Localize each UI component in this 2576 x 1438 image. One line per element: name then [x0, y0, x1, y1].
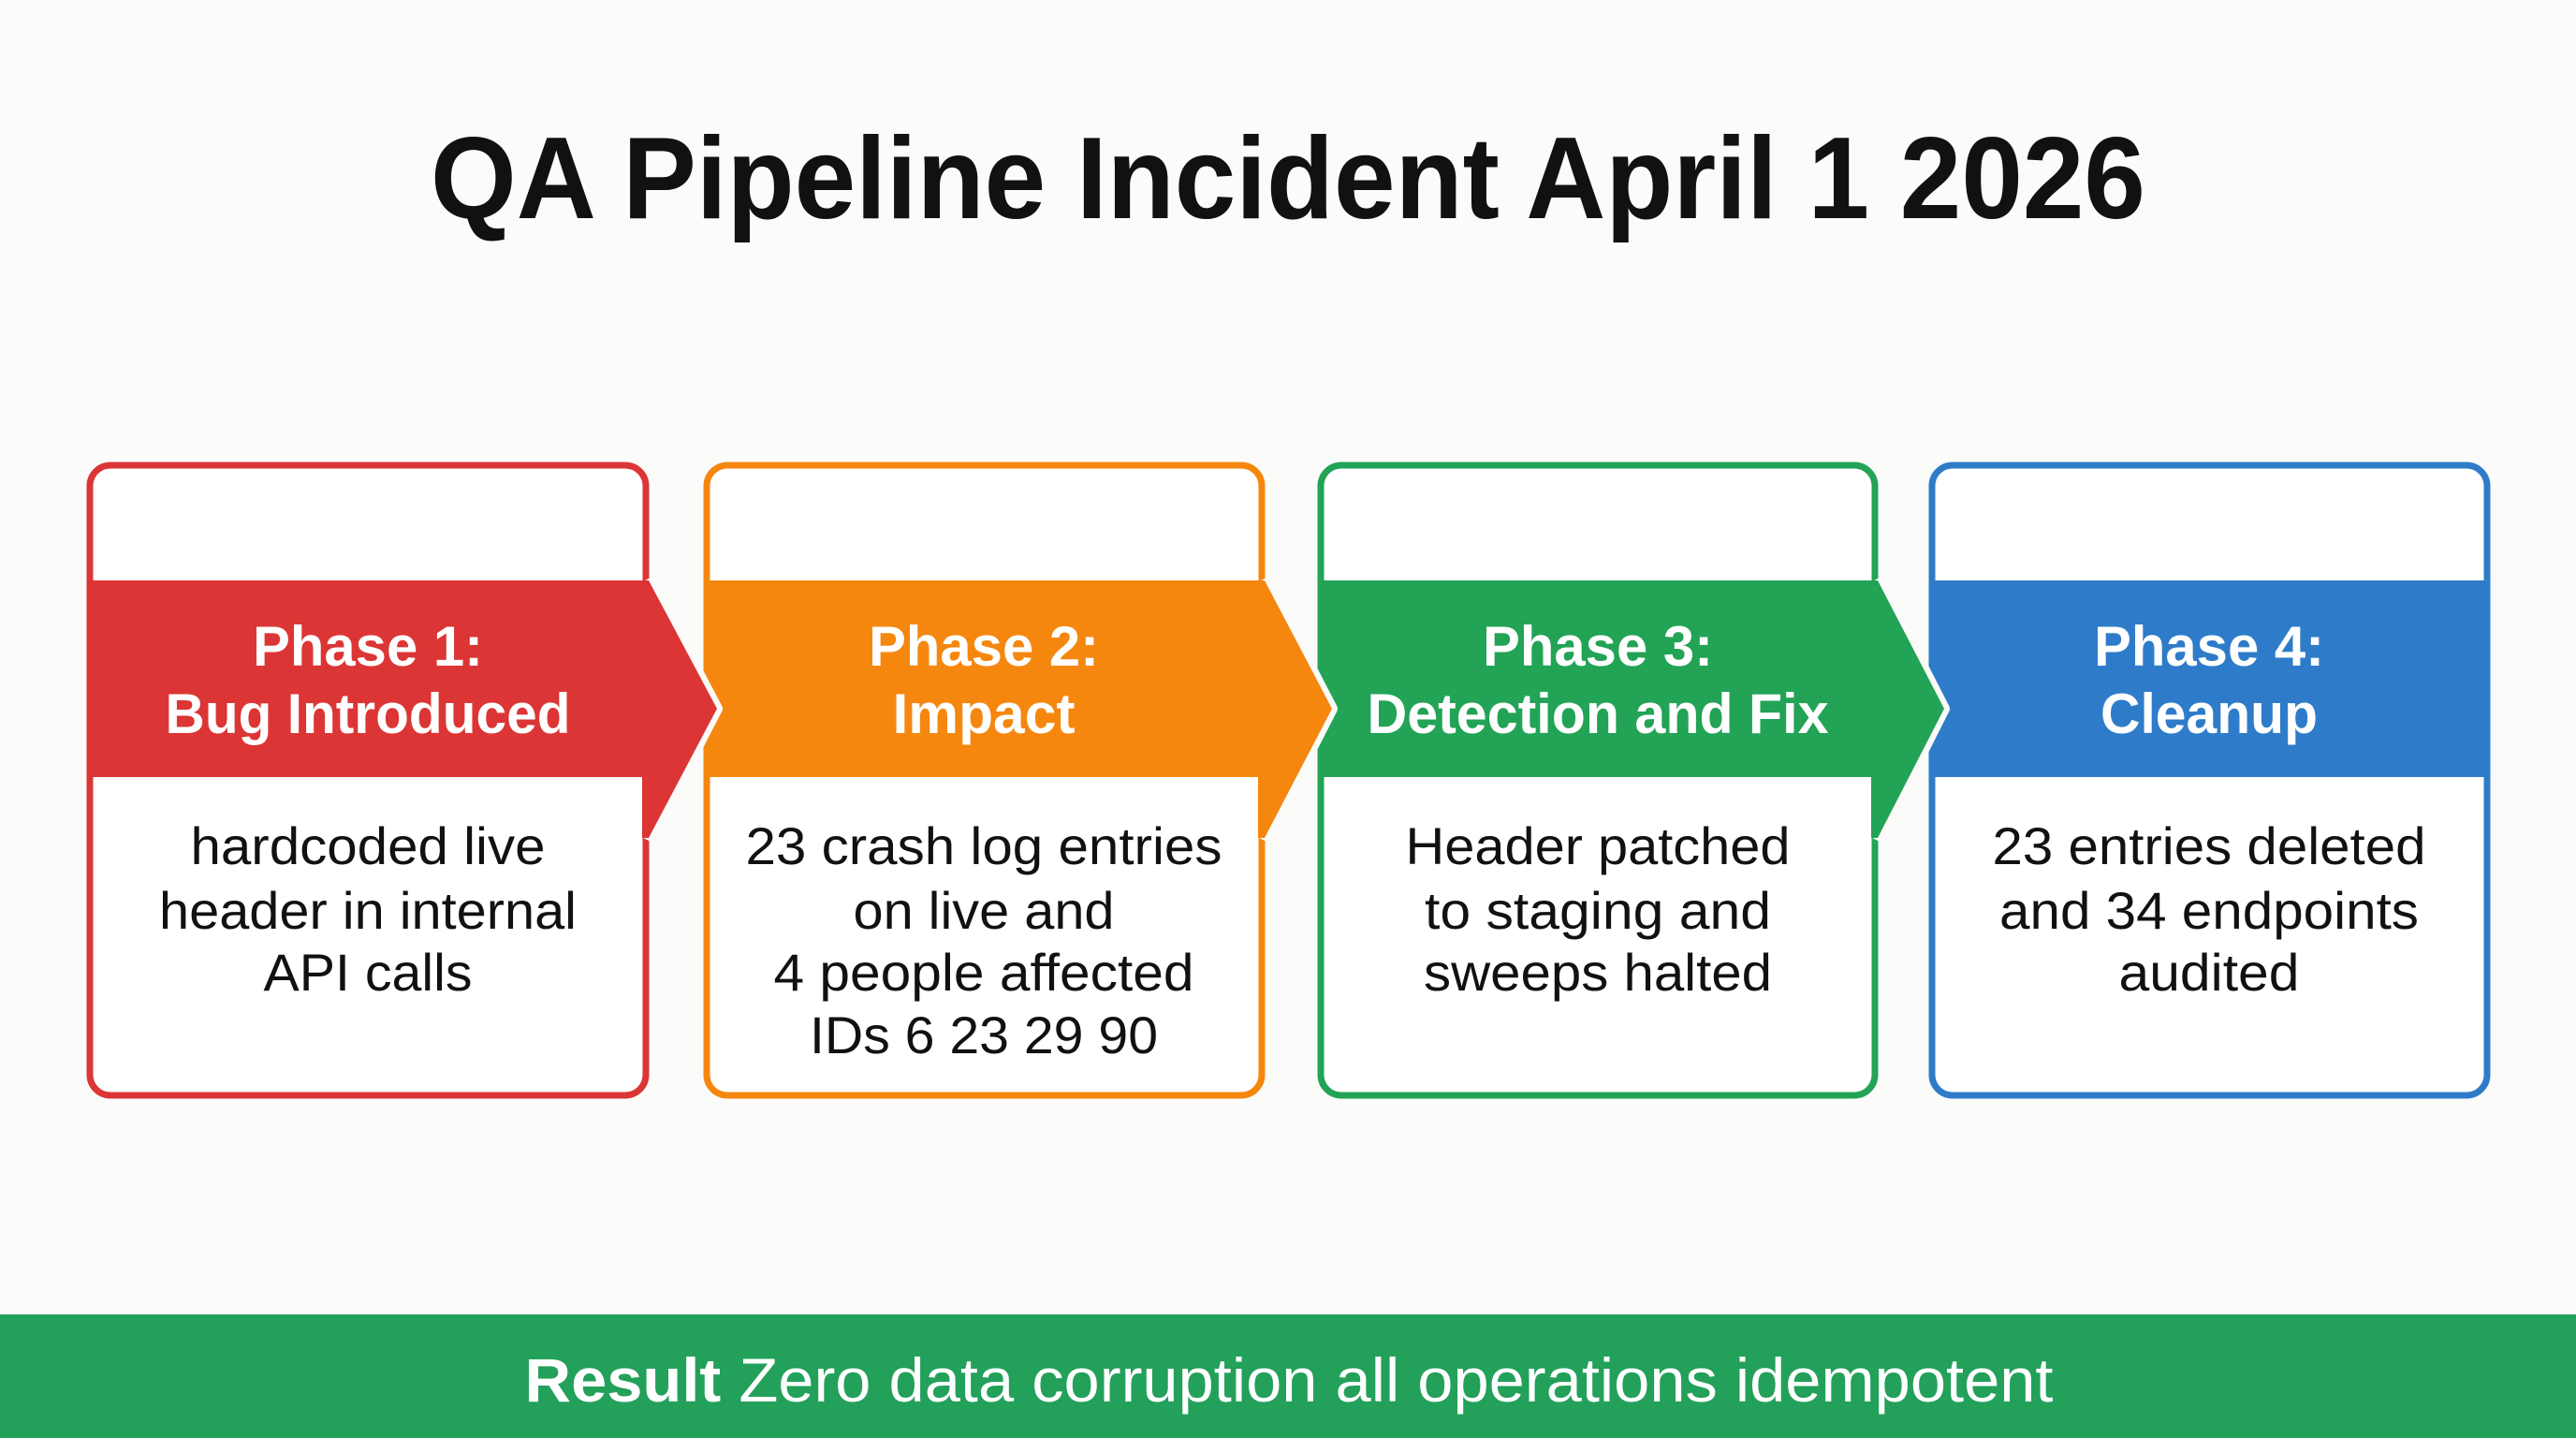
text: phase 3 body	[1406, 816, 1790, 1002]
text: phase 3 body: Header patched	[1406, 816, 1790, 875]
text: phase 2 body: IDs 6 23 29 90	[810, 1005, 1158, 1064]
text: phase 4 body	[1992, 816, 2426, 1002]
footer: result banner	[0, 1314, 2576, 1438]
panel: phase 4	[1932, 465, 2487, 1095]
heading: phase 4: Cleanup	[2100, 682, 2318, 745]
arrow: phase 3 to 4	[1871, 579, 1944, 841]
heading: phase 1: Bug Introduced	[165, 682, 571, 745]
heading: phase 2	[869, 615, 1099, 745]
heading: phase 4	[2094, 615, 2324, 745]
heading: phase 1	[165, 615, 571, 745]
panel: phase 3	[1321, 465, 1875, 1095]
heading: phase 2: Impact	[893, 682, 1076, 745]
arrow: phase 1 to 2	[642, 579, 717, 841]
panel: phase 2	[707, 465, 1262, 1095]
footer: result banner: Result Zero data corruption all operations idempotent	[524, 1345, 2054, 1415]
text: phase 2 body: 4 people affected	[773, 943, 1194, 1002]
text: phase 4 body: and 34 endpoints	[1999, 881, 2419, 940]
heading: phase 4: Phase 4:	[2094, 615, 2324, 678]
title: QA Pipeline Incident April 1 2026	[431, 114, 2145, 243]
text: phase 3 body: sweeps halted	[1424, 943, 1772, 1002]
text: phase 2 body: 23 crash log entries	[745, 816, 1222, 875]
text: phase 2 body	[745, 816, 1222, 1064]
text: phase 1 body	[159, 816, 577, 1002]
text: phase 4 body: audited	[2119, 943, 2299, 1002]
heading: phase 2: Phase 2:	[869, 615, 1099, 678]
text: phase 1 body: hardcoded live	[191, 816, 545, 875]
text: phase 4 body: 23 entries deleted	[1992, 816, 2426, 875]
arrow: phase 2 to 3	[1258, 579, 1332, 841]
text: phase 1 body: header in internal	[159, 881, 577, 940]
text: phase 2 body: on live and	[854, 881, 1114, 940]
heading: phase 1: Phase 1:	[253, 615, 483, 678]
text: phase 1 body: API calls	[264, 943, 472, 1002]
heading: phase 3: Phase 3:	[1483, 615, 1713, 678]
panel: phase 1	[90, 465, 646, 1095]
text: phase 3 body: to staging and	[1425, 881, 1771, 940]
heading: phase 3	[1367, 615, 1829, 745]
heading: phase 3: Detection and Fix	[1367, 682, 1829, 745]
